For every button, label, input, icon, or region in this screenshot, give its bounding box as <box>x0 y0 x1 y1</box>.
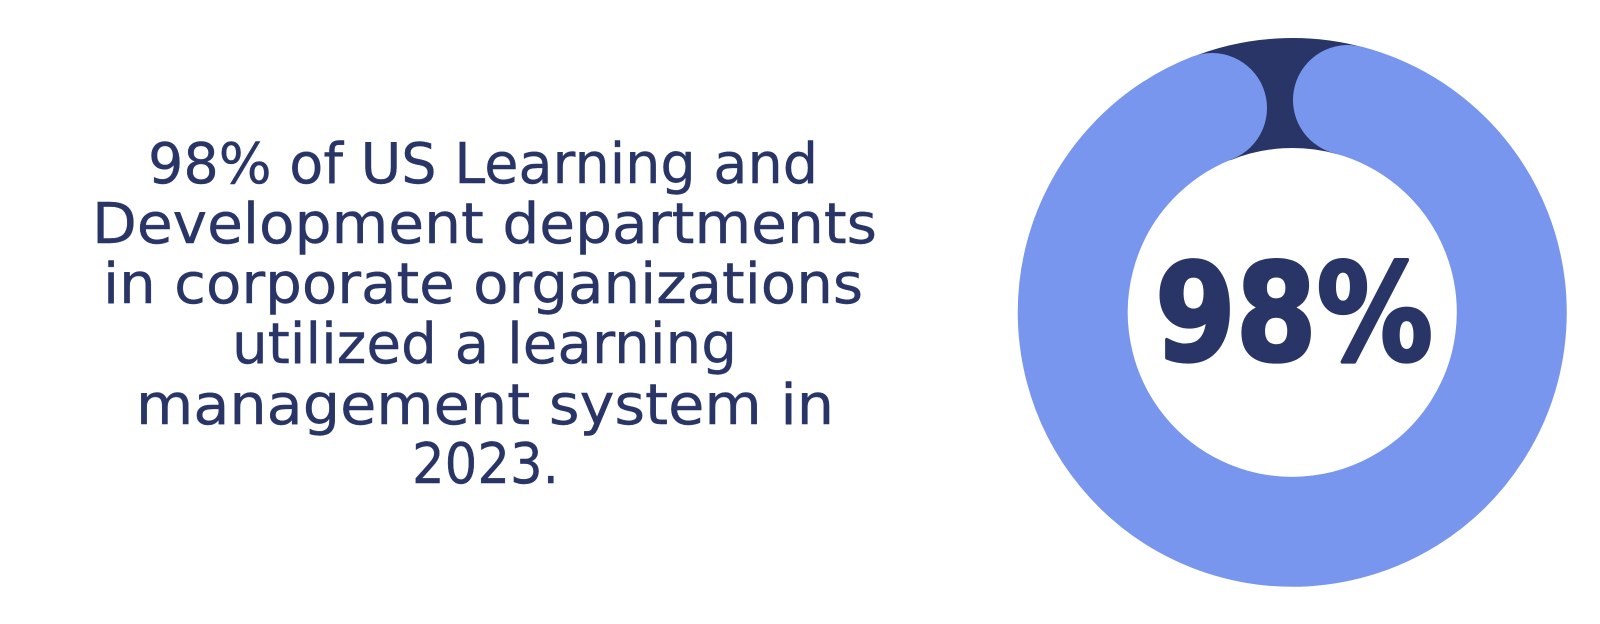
text block: description: management system in <box>136 373 834 438</box>
text block: description: 98% of US Learning and <box>148 132 818 197</box>
text block: description <box>92 132 877 497</box>
donut centre value: 98% <box>1155 235 1433 392</box>
text block: description: in corporate organizations <box>103 252 863 317</box>
donut value arc <box>1073 100 1512 532</box>
text block: description: Development departments <box>92 192 877 257</box>
donut track: gap segment <box>1210 93 1351 109</box>
text block: description: 2023. <box>412 432 559 497</box>
donut chart: 98% <box>1073 93 1512 532</box>
text block: description: utilized a learning <box>232 312 737 377</box>
